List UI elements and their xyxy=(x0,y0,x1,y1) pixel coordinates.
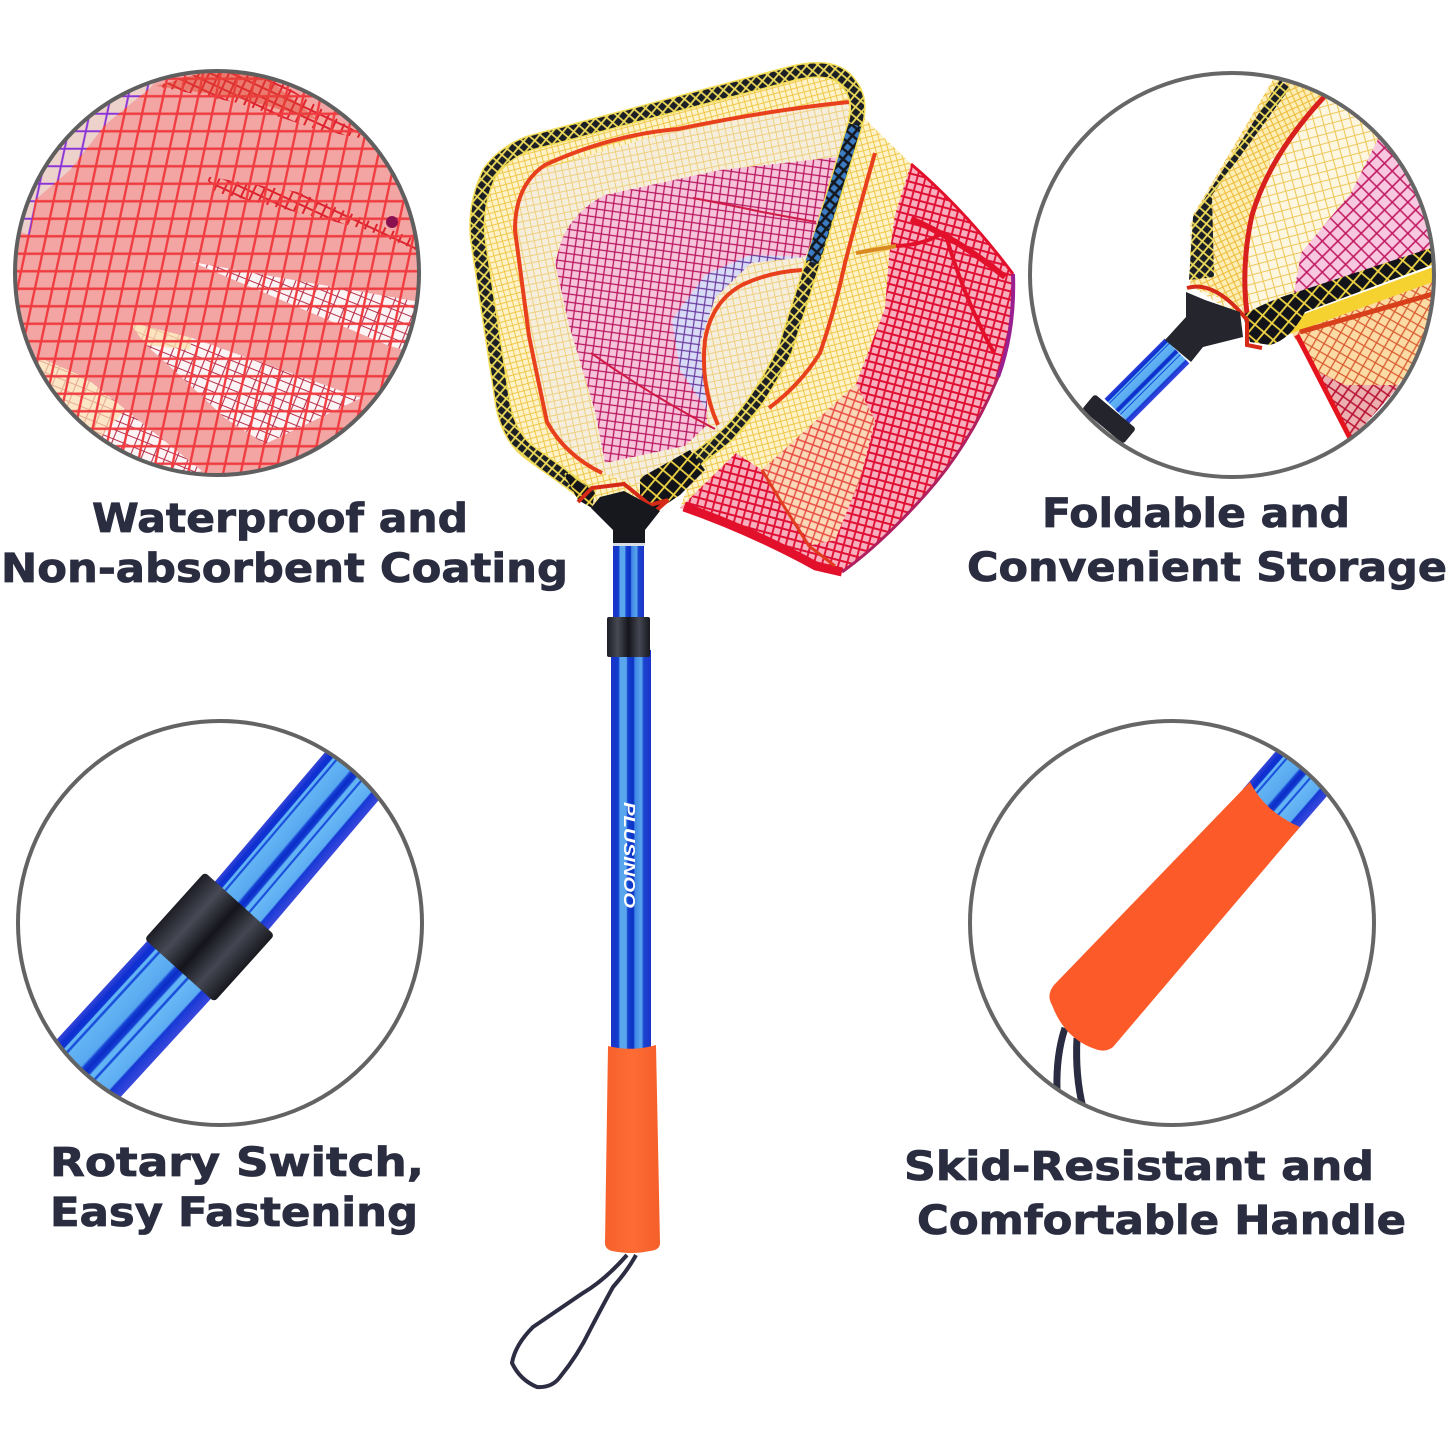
detail circle: rotary lock close-up xyxy=(18,721,422,1139)
caption: waterproof coating: Waterproof and xyxy=(92,496,468,542)
net bag: rim edges and veins xyxy=(684,164,1013,572)
net: yellow zone inside frame xyxy=(470,67,859,512)
net: red-orange rims xyxy=(515,102,896,473)
foam grip xyxy=(605,1045,660,1253)
net: pink mesh veins xyxy=(591,198,816,429)
net: cream inner mesh xyxy=(515,102,849,490)
caption: foldable storage: Convenient Storage xyxy=(967,545,1447,591)
caption: skid-resistant handle: Skid-Resistant and xyxy=(904,1144,1374,1190)
telescopic tube: lower xyxy=(611,650,651,1052)
detail circle: mesh coating close-up xyxy=(10,65,425,480)
detail circle: foam handle close-up xyxy=(970,721,1374,1125)
caption: skid-resistant handle xyxy=(904,1144,1406,1244)
caption: rotary switch xyxy=(50,1140,424,1236)
silver ring xyxy=(613,543,645,546)
net: gathered mesh at joint xyxy=(640,450,705,515)
detail circle: folding joint close-up xyxy=(1030,70,1445,477)
telescopic tube: upper xyxy=(613,544,644,624)
caption: rotary switch: Easy Fastening xyxy=(50,1190,418,1236)
handle socket xyxy=(591,491,660,545)
net bag: red back xyxy=(680,120,1013,572)
wrist loop xyxy=(512,1255,636,1387)
caption: waterproof coating xyxy=(1,496,568,592)
net: pink far-side mesh xyxy=(555,157,838,463)
caption: foldable storage: Foldable and xyxy=(1042,491,1350,537)
caption: foldable storage xyxy=(967,491,1447,591)
net: blue shaded mesh xyxy=(672,255,805,410)
caption: rotary switch: Rotary Switch, xyxy=(50,1140,424,1186)
caption: waterproof coating: Non-absorbent Coating xyxy=(1,546,568,592)
net: yellow band beside frame xyxy=(680,112,911,508)
caption: skid-resistant handle: Comfortable Handle xyxy=(917,1198,1406,1244)
fishing net product illustration xyxy=(470,67,1013,1387)
brand logo on tube: PLUSINOO xyxy=(620,802,637,909)
lock collar xyxy=(607,617,650,657)
net bag: lower orange zone xyxy=(762,384,875,545)
net: hoop frame xyxy=(477,70,858,497)
